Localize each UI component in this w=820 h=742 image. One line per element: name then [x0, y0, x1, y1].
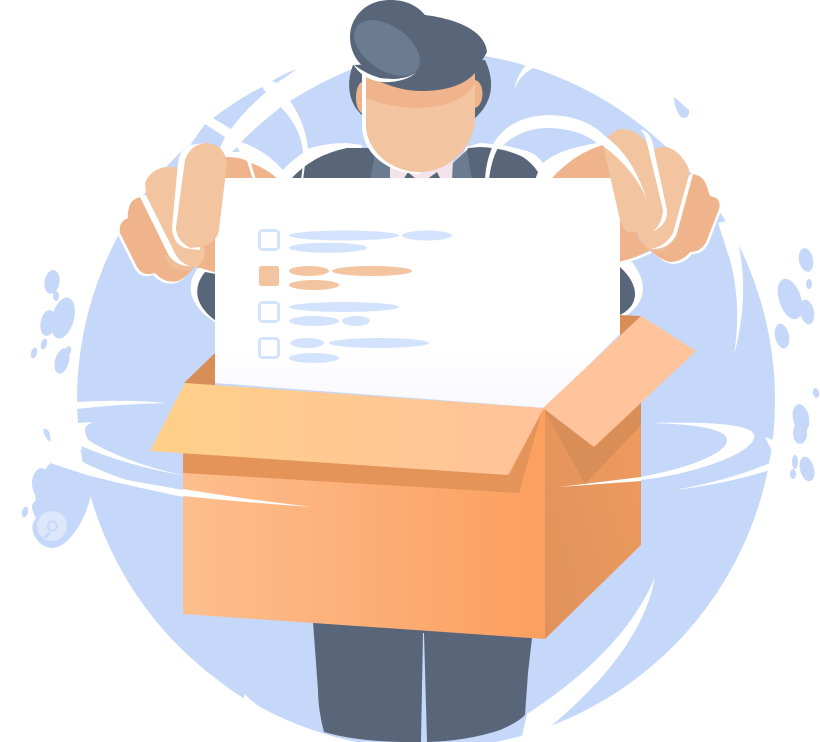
top finger stripe	[640, 129, 667, 232]
checklist row 3	[260, 302, 399, 326]
back hair	[349, 60, 491, 118]
finger stripe white	[140, 195, 195, 266]
outer edge	[652, 176, 722, 264]
legs	[313, 622, 532, 742]
forearm line	[620, 252, 651, 263]
side suit sleeves under paper	[191, 258, 643, 323]
face	[362, 72, 420, 174]
dark fingers	[120, 197, 195, 282]
ears	[356, 80, 482, 113]
second finger	[637, 147, 690, 250]
left hand	[118, 143, 227, 284]
right flap	[543, 316, 696, 447]
finger shadow	[643, 232, 679, 251]
watermark badge	[37, 511, 67, 541]
blue segments between arcs	[188, 69, 597, 170]
peach forearms	[197, 145, 650, 273]
top finger	[176, 143, 227, 248]
outer edge	[118, 199, 193, 284]
front shadow	[183, 408, 543, 493]
checklist paper	[215, 178, 620, 408]
hair bun	[350, 0, 436, 79]
dark fingers	[650, 174, 720, 262]
finger shadow	[163, 255, 205, 270]
hair crescent	[353, 64, 418, 82]
head	[344, 0, 491, 174]
droplets	[21, 97, 820, 548]
checklist row 1	[260, 230, 452, 253]
checklist row 2	[259, 266, 412, 290]
suit shoulders	[290, 143, 544, 180]
forehead shadow	[366, 70, 475, 108]
top finger halo	[172, 143, 205, 250]
box	[150, 315, 696, 639]
swooshes over box	[183, 477, 641, 507]
arm arc stripe	[602, 135, 651, 213]
splash blob	[32, 463, 91, 548]
lapels and shirt	[370, 150, 472, 180]
side shadow	[543, 403, 641, 484]
front face	[183, 408, 545, 639]
hair top	[363, 15, 487, 91]
right hand	[602, 129, 722, 264]
middle finger	[145, 167, 205, 267]
checklist row 4	[260, 338, 429, 363]
second finger stripe	[650, 174, 693, 249]
back inner flap	[184, 353, 215, 386]
background circle	[77, 51, 775, 742]
top finger	[603, 129, 663, 232]
front flap	[150, 383, 544, 475]
right side face	[545, 316, 641, 639]
hair highlight	[344, 9, 430, 87]
